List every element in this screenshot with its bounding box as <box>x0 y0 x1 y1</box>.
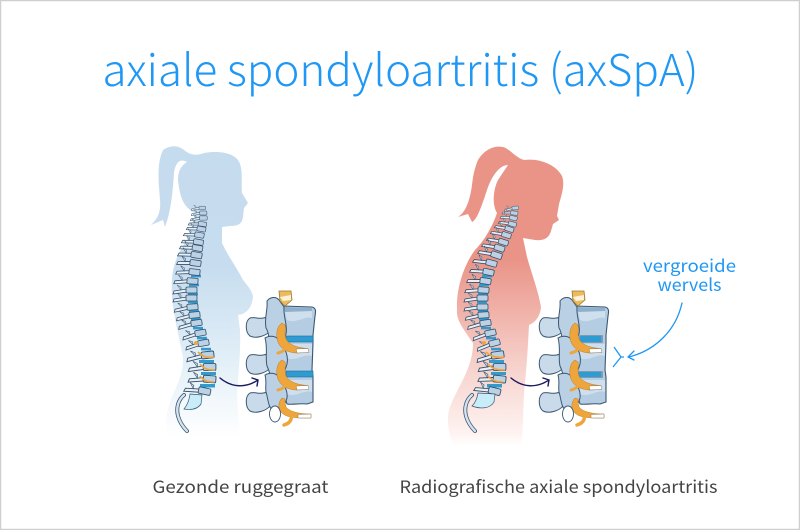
silhouette: healthy woman <box>151 146 253 438</box>
callout: vergroeide wervels: vergroeide <box>643 252 736 277</box>
silhouette: woman with axSpA <box>448 147 563 446</box>
inset: fused vertebrae <box>539 291 609 425</box>
spine: axSpA <box>464 205 519 431</box>
arrow: spine to inset <box>220 378 258 386</box>
inset: healthy vertebrae <box>246 291 316 425</box>
title: axiale spondyloartritis (axSpA) <box>102 35 698 99</box>
caption: radiografische axiale spondyloartritis: Radiografische axiale spondyloartritis <box>400 473 718 498</box>
callout: vergroeide wervels: wervels <box>658 271 722 296</box>
panel: gezonde ruggegraat <box>151 146 329 498</box>
spine: healthy <box>173 205 216 431</box>
panel: radiografische axiale spondyloartritis <box>400 147 736 498</box>
bracket: fused vertebrae marker <box>613 347 624 367</box>
arrow: spine to inset <box>511 378 549 386</box>
arrow: callout pointer <box>628 303 682 360</box>
caption: gezonde ruggegraat: Gezonde ruggegraat <box>152 473 329 498</box>
callout: vergroeide wervels <box>643 252 736 296</box>
